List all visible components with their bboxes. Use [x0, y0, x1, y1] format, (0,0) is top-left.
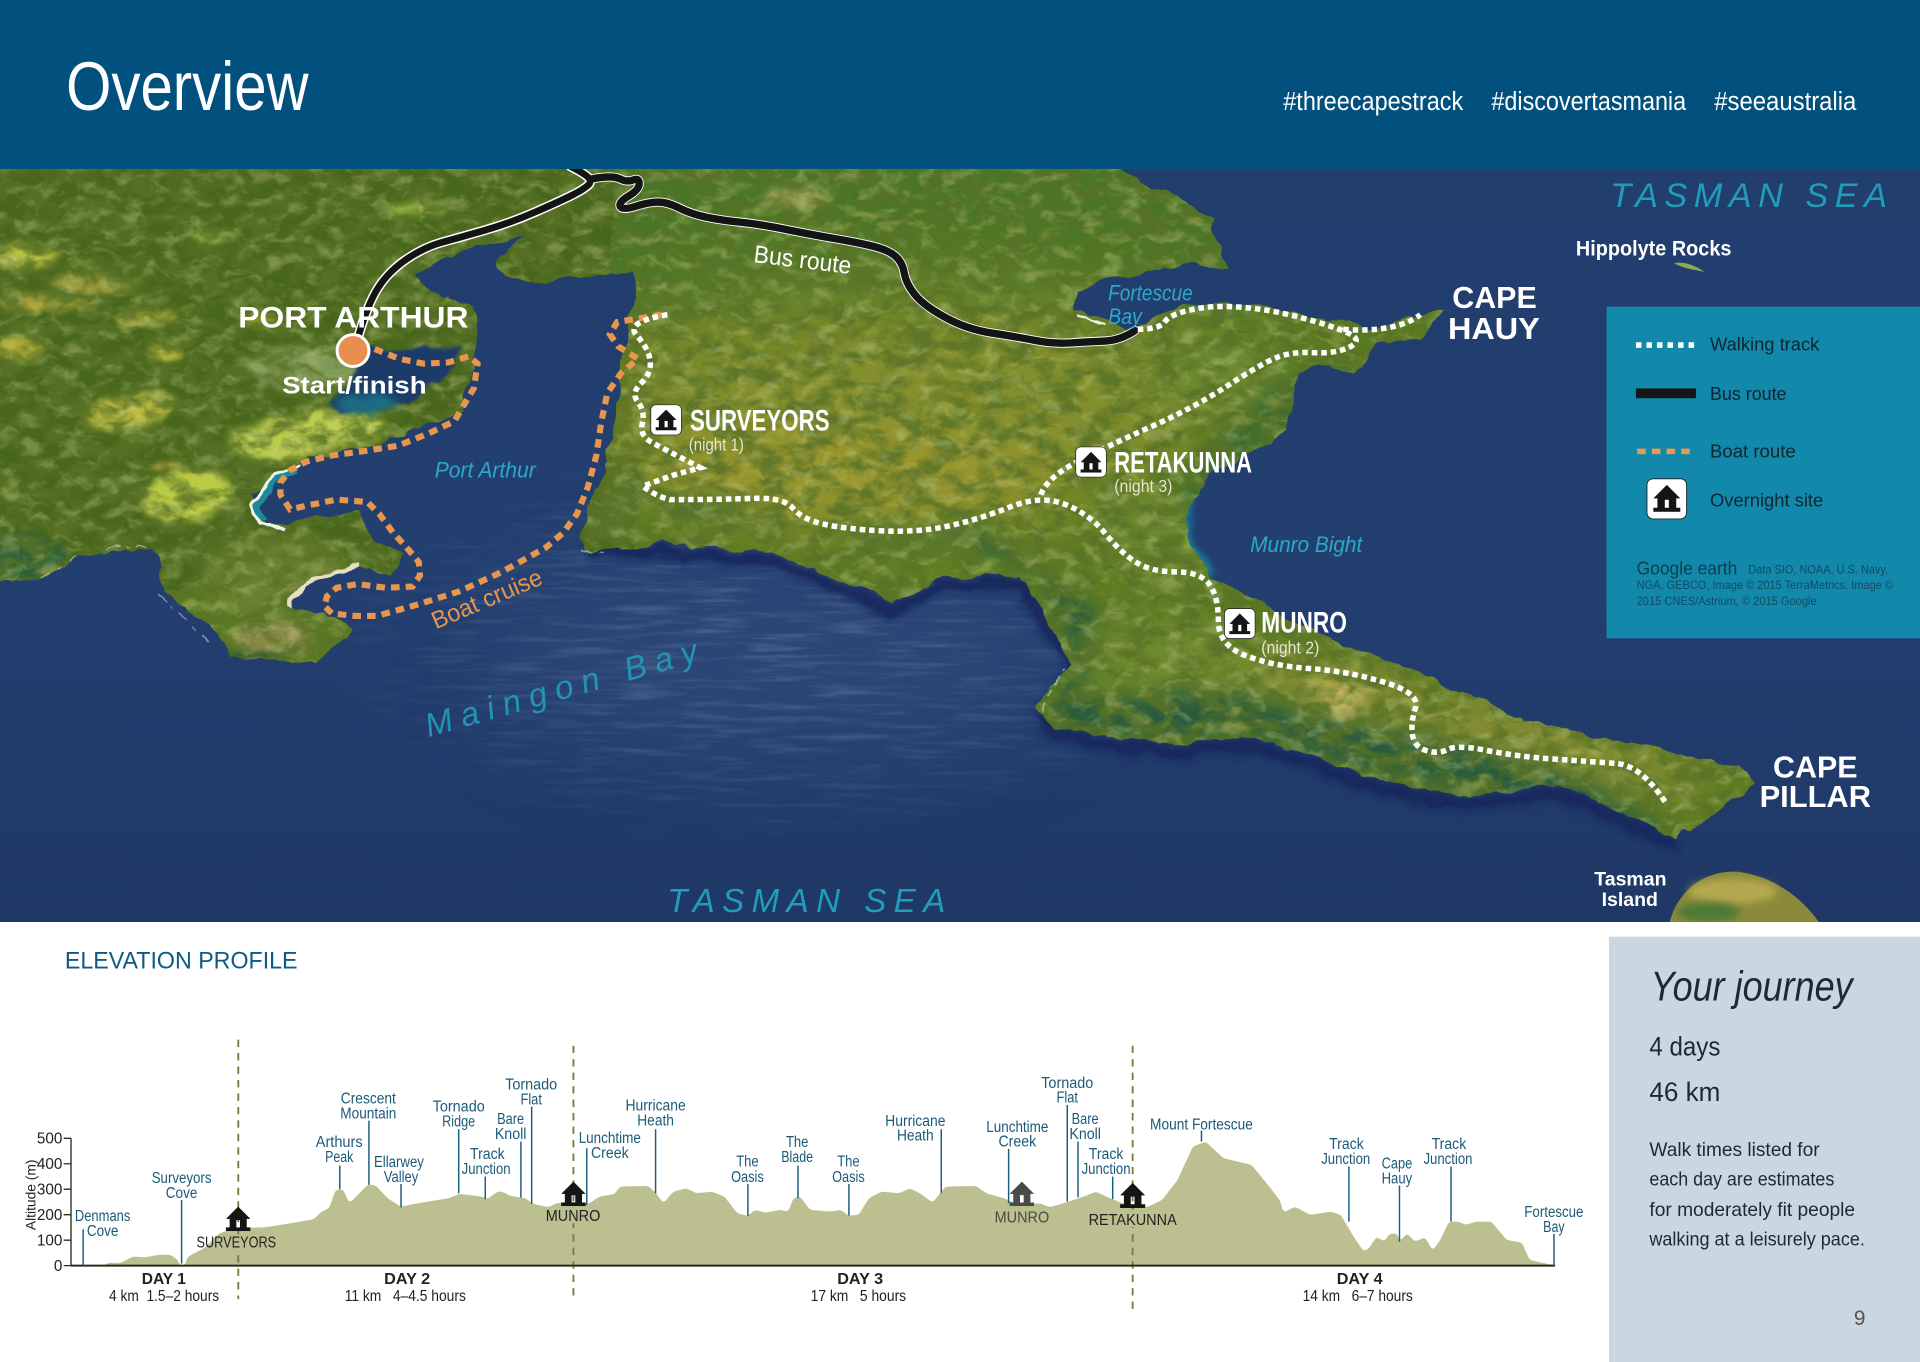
panel: your journey [1609, 937, 1920, 1362]
boat route [280, 315, 661, 616]
day summaries: 17 km 5 hours [811, 1288, 906, 1305]
waypoint labels: Cove [87, 1223, 118, 1240]
water names: Fortescue [1108, 281, 1193, 306]
map place names: Island [1602, 889, 1658, 911]
waypoint labels: Tornado [505, 1077, 557, 1094]
overnight site: Munro: MUNRO [1261, 607, 1347, 640]
page number: 9 [1854, 1307, 1865, 1330]
waypoint labels: Bay [1543, 1219, 1565, 1236]
data credit: Data SIO, NOAA, U.S. Navy, [1748, 563, 1888, 576]
boat route key [1637, 449, 1693, 454]
hut marker: Munro: MUNRO [546, 1208, 600, 1225]
waypoint labels: Track [470, 1146, 505, 1163]
map place names: HAUY [1448, 312, 1540, 346]
waypoint labels: Flat [520, 1091, 543, 1108]
hashtags [1283, 88, 1857, 116]
hut marker: Retakunna [1087, 1183, 1178, 1229]
elevation silhouette [97, 1142, 1561, 1273]
overnight site: Munro [1224, 607, 1347, 658]
walking track [634, 307, 1665, 802]
legend labels: Walking track [1710, 334, 1820, 355]
day summaries: 11 km 4–4.5 hours [345, 1288, 466, 1305]
overnight site: Surveyors: (night 1) [689, 435, 744, 455]
altitude labels [37, 1131, 62, 1275]
waypoint labels: Hauy [1382, 1170, 1412, 1187]
waypoint labels: Blade [781, 1149, 813, 1166]
waypoint labels: Heath [637, 1113, 674, 1130]
waypoint labels: Cape [1382, 1156, 1412, 1173]
waypoint labels: Mount Fortescue [1150, 1116, 1253, 1133]
hut marker: Surveyors: SURVEYORS [197, 1235, 276, 1252]
data credit: NGA, GEBCO, Image © 2015 TerraMetrics, Image © [1637, 579, 1893, 592]
title: Overview [66, 48, 309, 125]
waypoint labels: The [736, 1153, 759, 1170]
waypoint labels: Junction [462, 1161, 511, 1178]
waypoint labels: Arthurs [316, 1134, 363, 1151]
altitude labels: 300 [37, 1182, 62, 1199]
waypoint labels: Knoll [1069, 1126, 1101, 1143]
waypoint labels [75, 1075, 1583, 1240]
waypoint labels: Peak [325, 1149, 354, 1166]
day summaries: DAY 1 [142, 1271, 186, 1288]
hut marker: Munro alternate [995, 1182, 1049, 1226]
legend labels [1710, 334, 1823, 511]
waypoint labels: Valley [384, 1169, 419, 1186]
legend labels: Overnight site [1710, 490, 1823, 511]
bus route [358, 167, 1135, 343]
map place names: Tasman [1594, 868, 1667, 890]
waypoint labels: Lunchtime [986, 1119, 1048, 1136]
coastal surf [43, 545, 1065, 710]
data credit [1637, 557, 1893, 608]
waypoint labels: Track [1089, 1146, 1124, 1163]
altitude labels: 400 [37, 1156, 62, 1173]
elevation profile heading: ELEVATION PROFILE [65, 948, 298, 975]
legend labels: Bus route [1710, 383, 1787, 404]
day summaries: 14 km 6–7 hours [1303, 1288, 1413, 1305]
water names: TASMAN SEA [1610, 177, 1887, 215]
hashtags: #seeaustralia [1714, 88, 1857, 116]
waypoint labels: Junction [1082, 1161, 1131, 1178]
waypoint labels: Crescent [341, 1091, 397, 1108]
water names: TASMAN SEA [667, 883, 945, 920]
waypoint labels: Knoll [495, 1126, 526, 1143]
waypoint labels: Bare [1072, 1111, 1099, 1128]
waypoint labels: Hurricane [625, 1097, 686, 1114]
axis title: Altitude (m) [23, 1159, 39, 1230]
waypoint labels: Cove [166, 1185, 197, 1202]
days stat: 4 days [1649, 1032, 1720, 1062]
overnight site: Surveyors: SURVEYORS [690, 405, 830, 438]
map place names: Start/finish [282, 373, 427, 400]
water names: Port Arthur [435, 458, 537, 483]
day summaries: DAY 4 [1337, 1271, 1383, 1288]
map place names [238, 238, 1871, 911]
hashtags: #threecapestrack [1283, 88, 1463, 116]
walk times note: Walk times listed for [1649, 1139, 1820, 1161]
waypoint labels: Ridge [442, 1114, 475, 1131]
overnight site: Retakunna: (night 3) [1114, 476, 1172, 496]
altitude labels: 200 [37, 1207, 62, 1224]
day summaries: DAY 3 [837, 1271, 883, 1288]
map place names: PILLAR [1760, 780, 1871, 814]
water names: Bay [1108, 304, 1144, 329]
waypoint labels: Mountain [340, 1105, 396, 1122]
water names [421, 177, 1887, 920]
water names: Bus route [752, 241, 853, 280]
waypoint labels: Creek [591, 1145, 629, 1162]
waypoint labels: Ellarwey [374, 1154, 424, 1171]
overnight site: Retakunna: RETAKUNNA [1114, 447, 1252, 480]
waypoint labels: Hurricane [885, 1113, 945, 1130]
day summaries: 4 km 1.5–2 hours [109, 1288, 219, 1305]
waypoint labels: Lunchtime [579, 1130, 641, 1147]
panel heading: Your journey [1651, 962, 1855, 1009]
walk times note: for moderately fit people [1649, 1199, 1855, 1221]
waypoint labels: Junction [1321, 1151, 1370, 1168]
bus route key [1636, 388, 1696, 398]
altitude labels: 0 [54, 1258, 62, 1275]
overnight site: Munro: (night 2) [1261, 638, 1319, 658]
waypoint labels: The [786, 1134, 808, 1151]
walk times note: walking at a leisurely pace. [1648, 1228, 1865, 1250]
map place names: CAPE [1773, 751, 1858, 785]
satellite map [0, 159, 1920, 931]
data credit: Google earth [1637, 557, 1737, 578]
start/finish marker [337, 335, 369, 366]
data credit: 2015 CNES/Astrium, © 2015 Google [1637, 595, 1817, 608]
waypoint labels: Junction [1423, 1151, 1472, 1168]
waypoint labels: Track [1432, 1136, 1467, 1153]
water names: Maingon Bay [421, 632, 704, 745]
walk times note [1648, 1139, 1865, 1250]
hut marker: Munro [545, 1182, 602, 1225]
hut marker: Retakunna: RETAKUNNA [1089, 1212, 1177, 1229]
map place names: CAPE [1452, 281, 1537, 315]
waypoint labels: Creek [998, 1133, 1036, 1150]
overnight site: Surveyors [651, 405, 830, 455]
altitude labels: 100 [37, 1233, 62, 1250]
legend panel [1607, 307, 1920, 638]
waypoint labels: Fortescue [1524, 1204, 1583, 1221]
waypoint labels: Surveyors [152, 1170, 212, 1187]
waypoint labels: Heath [897, 1127, 934, 1144]
walking track key [1636, 343, 1696, 347]
inner bay water [328, 348, 459, 411]
water names: Boat cruise [428, 564, 546, 635]
waypoint labels: Bare [497, 1111, 524, 1128]
waypoint labels: Flat [1057, 1090, 1079, 1107]
waypoint labels: Tornado [433, 1098, 485, 1115]
overnight site key [1647, 479, 1687, 519]
Hippolyte Rocks islets [1674, 263, 1704, 272]
hashtags: #discovertasmania [1491, 88, 1687, 116]
waypoint leader lines [83, 1105, 1554, 1266]
water names: Munro Bight [1250, 532, 1363, 557]
header band [0, 0, 1920, 169]
day divider lines [238, 1040, 1133, 1313]
waypoint labels: Oasis [832, 1169, 865, 1186]
waypoint labels: Track [1329, 1136, 1364, 1153]
map place names: PORT ARTHUR [238, 301, 468, 334]
day summaries: DAY 2 [384, 1271, 430, 1288]
Tasman Island [1670, 872, 1819, 922]
waypoint labels: Denmans [75, 1208, 131, 1225]
baseline and altitude axis [64, 1138, 1555, 1266]
land mass [0, 169, 1755, 852]
elevation profile chart [23, 1040, 1583, 1313]
beaches [259, 471, 300, 520]
hut marker: Munro alternate: MUNRO [995, 1209, 1049, 1226]
altitude labels: 500 [37, 1131, 62, 1148]
legend labels: Boat route [1710, 440, 1796, 461]
waypoint labels: The [837, 1153, 860, 1170]
map place names: Hippolyte Rocks [1576, 238, 1731, 261]
day summaries [109, 1271, 1413, 1305]
overnight site: Retakunna [1076, 447, 1252, 496]
cleared farmland patches [0, 201, 453, 530]
waypoint labels: Tornado [1041, 1075, 1093, 1092]
waypoint labels: Oasis [731, 1169, 764, 1186]
hut marker: Surveyors [197, 1207, 276, 1253]
walk times note: each day are estimates [1649, 1168, 1834, 1190]
distance stat: 46 km [1649, 1077, 1720, 1107]
